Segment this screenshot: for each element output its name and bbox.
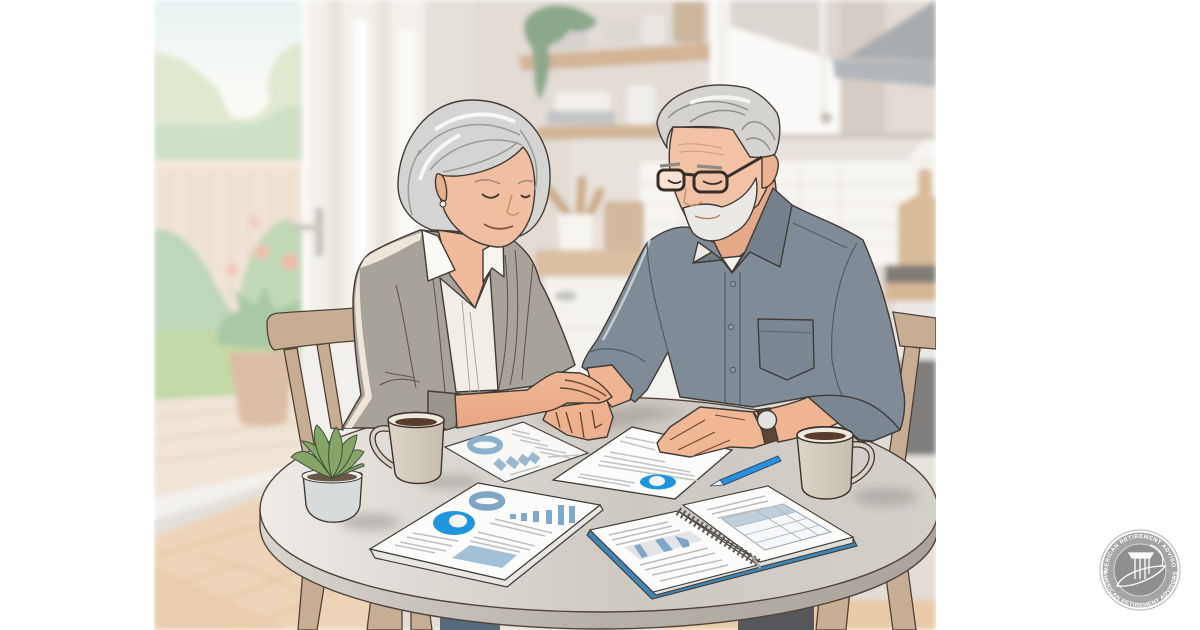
cuff [428,391,460,430]
cardigan [342,230,575,430]
donut chart [470,438,500,452]
ear [762,154,778,188]
collar [693,242,712,263]
succulent plant [291,425,364,522]
beard [683,178,757,241]
man's and woman's figures [342,85,905,457]
woman's forearm and hand [455,372,612,428]
shirt pocket [758,319,814,380]
seal column icon [1117,545,1165,586]
illustration scene [154,0,938,630]
man's right sleeve cuff [808,395,900,441]
woman [342,100,575,430]
spiral notebook [587,486,857,599]
nose [684,188,702,206]
shirt buttons [728,281,736,373]
neck [712,180,777,260]
paper stack [370,483,603,587]
blurred kitchen and garden background [154,0,936,630]
man's left forearm [587,365,633,407]
notebook table [722,504,831,550]
chair: woman [267,308,432,630]
neck [438,231,488,309]
shelves with dishes, jars and plant [518,2,710,140]
stack area chart [452,545,517,568]
shirt folds and placket [590,223,857,408]
face [439,147,535,247]
forehead lines [678,144,724,155]
man's hand on paper [657,407,768,457]
eyes and brows [668,180,722,184]
blouse collar [422,230,455,281]
upper cabinets and range hood [710,0,936,134]
coffee cup: right [797,427,872,499]
stack text lines [395,519,552,553]
stack donut chart [472,494,502,508]
wristwatch [757,408,778,444]
table [260,397,938,629]
coffee cup: left [373,412,444,484]
blue logo badge [640,474,676,490]
window frame and curtain [154,0,431,521]
face [669,127,766,242]
wall tiles [636,132,936,268]
report text lines [510,430,580,475]
pen [710,456,781,486]
undershirt [722,256,742,272]
seal ring text: AMERICAN RETIREMENT ADVISORS [1104,534,1176,572]
shirt [582,188,905,442]
garden view through window [154,0,304,497]
hair back [398,100,550,236]
stack blue badge [433,511,475,535]
notebook bar chart [624,531,703,560]
trousers under table [440,607,814,630]
hair [657,85,780,157]
counter with utensils and boards [535,168,936,485]
chair: man [816,312,936,630]
face features [482,194,530,198]
man's fist [543,400,613,440]
ear and earring [435,174,447,201]
man's right forearm [753,397,838,442]
glasses [658,157,762,192]
notebook text lines [609,496,768,581]
stack bar chart [513,505,572,525]
paper: centre sheet [553,427,732,499]
succulent leaves [291,425,364,478]
paper: small report [445,422,588,482]
centre sheet text lines [578,437,700,486]
seal ring text lower: AMERICAN RETIREMENT ADVISORS [1103,571,1177,607]
blouse [440,272,498,392]
man [455,85,905,457]
table soft shadows [340,405,917,531]
floor [154,482,936,630]
bar chart [496,455,538,468]
spiral binding [678,511,760,568]
hair highlights [408,125,537,215]
